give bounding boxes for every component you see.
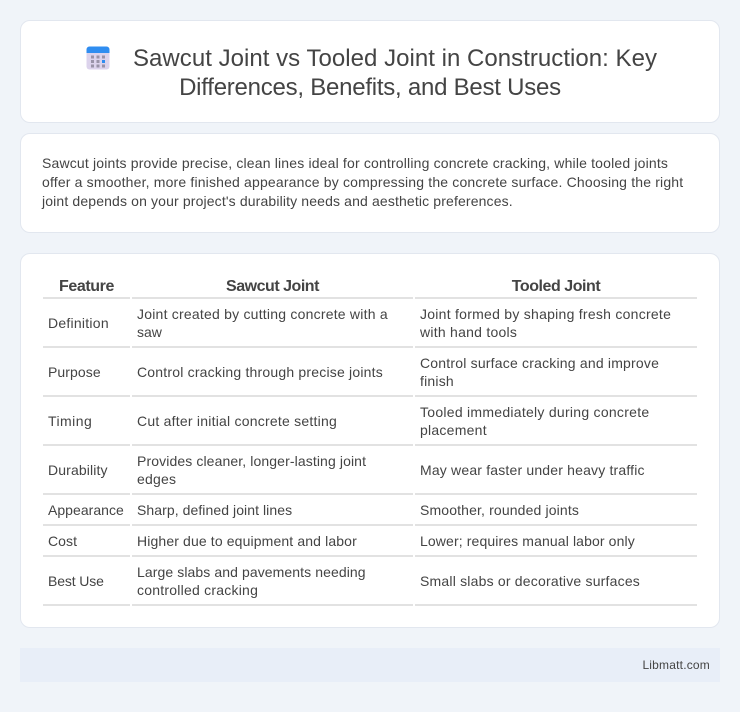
table: comparison: Large slabs and pavements needing (137, 564, 366, 580)
column heading: Feature: Feature (59, 278, 114, 295)
table: comparison: edges (137, 471, 176, 487)
icon: calendar (86, 46, 110, 70)
summary text: joint depends on your project's durability needs and aesthetic preferences. (42, 193, 513, 209)
title (133, 45, 657, 101)
column heading: Tooled Joint: Tooled Joint (512, 278, 600, 295)
table: comparison: Higher due to equipment and labor (137, 533, 357, 549)
footer bar (20, 648, 720, 682)
row: Purpose: Purpose (48, 364, 101, 380)
row: Definition: Definition (48, 315, 109, 331)
summary text: offer a smoother, more finished appearance by compressing the concrete surface. Choosing the right (42, 174, 683, 190)
table: comparison: Sharp, defined joint lines (137, 502, 292, 518)
table: comparison: with hand tools (420, 324, 517, 340)
table: comparison: Lower; requires manual labor only (420, 533, 635, 549)
summary text: Sawcut joints provide precise, clean lines ideal for controlling concrete cracking, while tooled joints (42, 155, 668, 171)
table: comparison: placement (420, 422, 487, 438)
table: comparison: Provides cleaner, longer-lasting joint (137, 453, 366, 469)
table: comparison: Joint formed by shaping fresh concrete (420, 306, 671, 322)
table: comparison (43, 278, 697, 606)
table: comparison: saw (137, 324, 162, 340)
column heading: Sawcut Joint: Sawcut Joint (226, 278, 319, 295)
panel: comparison table card (20, 253, 720, 628)
table: comparison: Smoother, rounded joints (420, 502, 579, 518)
footer credit: Libmatt.com (642, 658, 710, 672)
title: Sawcut Joint vs Tooled Joint in Construction: Key (133, 45, 657, 72)
table: comparison: Cut after initial concrete setting (137, 413, 337, 429)
table: comparison: Tooled immediately during concrete (420, 404, 649, 420)
table: comparison: Small slabs or decorative surfaces (420, 573, 640, 589)
table: comparison: May wear faster under heavy traffic (420, 462, 645, 478)
row: Appearance: Appearance (48, 502, 124, 518)
row: Timing: Timing (48, 413, 92, 429)
summary text (42, 155, 684, 209)
table: comparison: Joint created by cutting concrete with a (137, 306, 388, 322)
panel: title card (20, 20, 720, 123)
row: Cost: Cost (48, 533, 77, 549)
table: comparison: controlled cracking (137, 582, 258, 598)
row: Durability: Durability (48, 462, 108, 478)
table: comparison: Control surface cracking and improve (420, 355, 659, 371)
table: comparison: finish (420, 373, 454, 389)
panel: summary card (20, 133, 720, 233)
title: Differences, Benefits, and Best Uses (179, 74, 561, 101)
table: comparison: Control cracking through precise joints (137, 364, 383, 380)
row: Best Use: Best Use (48, 573, 104, 589)
